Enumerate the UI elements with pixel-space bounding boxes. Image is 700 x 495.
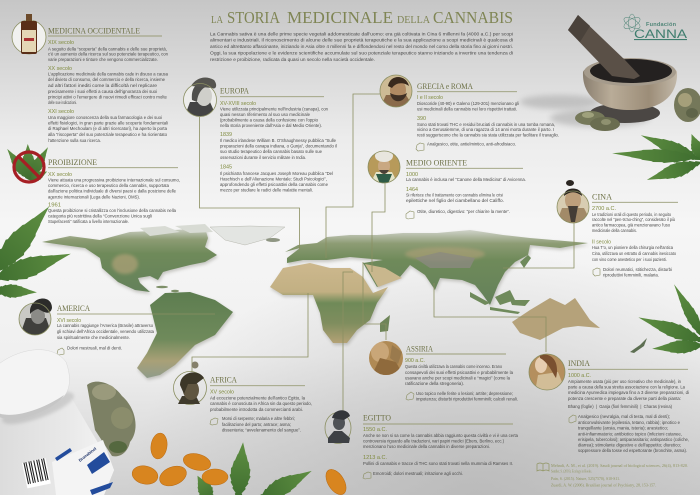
panel: america (19, 298, 155, 355)
connector lines (57, 94, 574, 412)
text: XV secolo (210, 390, 312, 412)
text: indications: Morsi di serpente; malaria e altre febbri; (222, 416, 295, 421)
text: I e II secolo (417, 95, 519, 112)
portrait: european doctor (184, 78, 217, 118)
text: XX secolo: del divieto di consumo, del commercio e della ricerca, insieme (48, 77, 166, 82)
text: 1464: epilettiche nel figlio del ciambellano del Califfo. (406, 198, 504, 203)
panel: india (529, 354, 689, 453)
text: XXI secolo: XXI secolo (48, 109, 74, 115)
text: XVI secolo: gli schiavi dell'Africa occidentale, venendo utilizzata (57, 329, 155, 334)
text: XVI secolo (57, 318, 155, 340)
intro text: antico ed altrettanto affascinante, iniziando in Asia oltre 4 millenni fa e diffondendosi nel resto del mondo nel corso della storia fino ai giorni nostri. (210, 44, 513, 49)
map: southeast asia islands (470, 290, 530, 314)
title: MEDICINALE (287, 8, 393, 27)
text: 1961: Stupefacenti” ratificata a livello internazionale. (48, 219, 129, 224)
text: 1000 a.C.: 1000 a.C. (568, 373, 591, 379)
text: indications: impotenza; disturbi riproduttivi femminili; calcoli renali. (416, 396, 518, 402)
panel: grecia e roma (380, 75, 559, 151)
text: 2700 a.C.: raccolte nel “pen-ts'ao-ching”, considerato il più (592, 217, 676, 222)
text: XX secolo: L'applicazione medicinale della cannabis cade in disuso a causa (48, 72, 169, 76)
portrait: chinese physician (556, 180, 592, 224)
heading: MEDICINA OCCIDENTALE (48, 26, 140, 36)
text: 1839: osservazioni durante il servizio militare in India. (220, 155, 306, 160)
text: XV secolo: XV secolo (210, 390, 234, 396)
text: XXI secolo: effetti fisiologici, in gran parte grazie alle scoperte fondamentali (48, 121, 168, 126)
heading: AFRICA (210, 376, 237, 385)
text: XV secolo: Ad eccezione potenzialmente dell'antico Egitto, la (210, 396, 306, 400)
text: indications: Emorroidi; dolori mestruali; irritazione agli occhi. (373, 471, 463, 476)
references: Pain, S. (2015). Nature, 525(7570), S10-S11. (551, 476, 620, 482)
text: 390: vicino a Gerusalemme, di una ragazza di 14 anni morta durante il parto. I (417, 127, 554, 132)
text: XX secolo: delle sue indicazioni. (48, 100, 77, 105)
map: arctic islands (140, 224, 213, 236)
portrait: medicine bottle (12, 14, 46, 54)
references: Sandler, S. (2016). Ecology in Books. (551, 468, 592, 474)
logo: Fundación Canna (622, 14, 687, 41)
text: 1000 a.C.: parte a causa della sua stretta associazione con la religione. La (568, 384, 686, 390)
text: XX secolo: ad altri fattori inediti come la difficoltà nel replicare (48, 83, 158, 88)
text: II secolo: II secolo (592, 240, 611, 246)
text: XVI secolo: La cannabis raggiunge l'America (Brasile) attraverso (57, 323, 154, 328)
leaves: top right (612, 129, 700, 187)
text: XIX secolo: A seguito della “scoperta” della cannabis e delle sue proprietà, (48, 46, 167, 52)
text: 1845: Il psichiatra francese Jacques Joseph Moreau pubblica “Del (220, 171, 333, 176)
text: 1839: suo studio terapeutico della cannabis basato sulle sue (220, 149, 323, 154)
portrait: american figure (19, 298, 52, 335)
map: africa (270, 263, 388, 343)
text: indications: Analgesico (nevralgia, mal di testa, mal di denti); (578, 414, 670, 419)
text: XXI secolo: di Raphael Mechoulam (e di altri ricercatori), ha aperto la porta (48, 126, 168, 131)
text: 2700 a.C.: 2700 a.C. (592, 206, 616, 212)
map: iceland (266, 238, 280, 242)
panel: europa (184, 78, 337, 192)
text: indications: Otite, diuretico, digestivo: “per chiarire la mente”. (417, 209, 510, 214)
title (211, 8, 513, 27)
text: XXI secolo: l'attenzione sulla sua ricerca. (48, 138, 101, 143)
text: XX secolo: principi attivi o l'emergere di nuovi rimedi efficaci contro molte (48, 94, 168, 100)
text: 1550 a.C.: 1550 a.C. (363, 427, 387, 433)
text: 1839: 1839 (220, 132, 232, 138)
text: 1961: Questa proibizione si cristallizza con l'inclusione della cannabis nella (48, 208, 177, 213)
text: 1000: La cannabis è inclusa nel “Canone della Medicina” di Avicenna. (406, 177, 526, 182)
text: 1550 a.C.: controversia riguardo alle traduzioni, vari papiri medici (Ebers, Berlino, ecc.) (363, 438, 505, 444)
text: indications: anti-infiammatorio; antibiotico topico (infezioni cutanee, (578, 432, 682, 436)
text: XX secolo: precisamente i suoi effetti a causa dell'ignoranza dei suoi (48, 89, 157, 94)
text: indications: erisipela, tubercolosi); antiparassitario; antispastico (coliche, (578, 437, 689, 442)
heading: ASSIRIA (406, 344, 433, 354)
text: 2700 a.C.: Le tradizioni orali di questo periodo, in seguito (592, 212, 672, 217)
text: XV secolo: probabilmente introdotta da commercianti arabi. (210, 407, 303, 412)
map: desert southwest (112, 254, 138, 274)
heading: MEDIO ORIENTE (406, 158, 467, 168)
icon: hand (569, 415, 576, 423)
text: XV-XVIII secolo: XV-XVIII secolo (220, 101, 256, 107)
text: XVI secolo: sia spiritualmente che medicinalmente. (57, 335, 130, 340)
text: 900 a.C.: Questa civiltà utilizzava la cannabis come incenso. Erano (405, 364, 503, 369)
text: XV-XVIII secolo (220, 101, 329, 128)
icon: hand (406, 211, 414, 219)
text: XIX secolo: varie preparazioni e tinture che vengono commercializzate. (48, 57, 158, 62)
text: XX secolo: dall'azione politica individuale di diversi paesi e dalla posizione delle (48, 188, 177, 194)
leaves: lower right (636, 281, 700, 356)
text: 2700 a.C. (592, 206, 676, 233)
text: 1961: 1961 (48, 202, 61, 208)
photo: cannabis bud by bottle (87, 382, 136, 456)
text: indications (222, 416, 301, 432)
references (537, 463, 688, 488)
heading: CINA (592, 192, 612, 202)
map: north america (42, 228, 217, 292)
panel: egitto (325, 410, 519, 479)
intro text: Oggi, la sua ripopolazione e le evidenze scientifiche accumulate sul suo potenziale terapeutico stanno iniziando a invertire una tendenza di (210, 50, 513, 56)
intro text: alimentari e industriali. Il riconoscimento di alcune delle sue proprietà terapeutiche e la sua applicazione a scopi medicinali è qualcosa di (210, 38, 513, 42)
map: eurasia (285, 230, 588, 305)
references: Mehndi, A. M., et al. (2019). Saudi journal of biological sciences, 26(4), 813-820. (551, 463, 688, 469)
map: madagascar (380, 315, 390, 332)
text: indications: anticonvulsivante (epilessia, tetano, rabbia); ipnotico e (578, 420, 681, 425)
heading: AMERICA (57, 304, 90, 313)
photo: medicine bottle: Dronabinol (78, 446, 97, 463)
map: japan (520, 255, 531, 268)
portrait: avicenna (368, 150, 400, 184)
text: XX secolo (48, 66, 169, 105)
heading: GRECIA e ROMA (417, 82, 473, 91)
title: LA (211, 14, 223, 26)
icon: hand (406, 392, 414, 400)
text: 1845: 1845 (220, 164, 232, 170)
icon: hand (210, 418, 218, 425)
text: II secolo: con vino come anestetico per i suoi pazienti. (592, 257, 667, 262)
text: 1845: mezzo per studiare le radici delle malattie mentali. (220, 188, 313, 192)
text: XX secolo: XX secolo (48, 172, 72, 178)
panel: cina (556, 180, 678, 278)
icon: book (537, 463, 549, 471)
map: new zealand (630, 338, 647, 353)
photo: cannabis bud right (674, 88, 700, 122)
text: XIX secolo: XIX secolo (48, 40, 74, 46)
heading: EGITTO (363, 414, 391, 422)
text: 1845: Haschisch e dell'Alienazione Mentale: Studi Psicologici”, (220, 176, 327, 182)
text: indications (603, 267, 672, 278)
text: indications: Dolori reumatici, stitichezza, disturbi (603, 267, 672, 272)
text: 390: 390 (417, 116, 426, 122)
text: XX secolo: XX secolo (48, 66, 72, 72)
text: 1000 a.C.: medicina Ayurvedica impiegava fino a 3 diverse preparazioni, di (568, 390, 689, 395)
text: 1961: categoria più restrittiva della “Convenzione Unica sugli (48, 214, 152, 218)
text: XX secolo: commercio, ricerca e uso terapeutico della cannabis, supportata (48, 183, 170, 188)
text: XV-XVIII secolo: quasi nessun riferimento al suo uso medicinale (220, 112, 311, 117)
text: II secolo: Cina, utilizzava un estratto di cannabis inesiccato (592, 251, 677, 256)
text: XIX secolo: c'è un aumento della ricerca sul suo potenziale terapeutico, con (48, 52, 169, 57)
text: 390: Sono stati trovati THC e residui bruciati di cannabis in una tomba romana, (417, 122, 555, 127)
icon: prohibition sign over leaf (3, 144, 53, 184)
portrait: african bust (174, 362, 206, 404)
map: central asia steppe (405, 247, 485, 261)
text: XX secolo: agenzie internazionali (Lega delle Nazioni, OMS). (48, 194, 140, 200)
text: indications: diarrea); stimolante digestivo e dell'appetito; diuretico; (578, 442, 681, 448)
capsules (130, 432, 350, 495)
text: 2700 a.C.: antico farmacopea, già menzionavano l'uso (592, 222, 671, 228)
text: 1000 a.C.: potenza crescente e preparate da diverse parti della pianta: (568, 396, 681, 401)
photo: medicine bottle (0, 350, 114, 495)
intro text (210, 32, 513, 62)
text: 900 a.C. (405, 358, 514, 386)
portrait: dioscorides (380, 75, 414, 108)
leaves: bottom (191, 441, 316, 495)
text: 1213 a.C. (363, 455, 513, 466)
text: 1845 (220, 164, 333, 192)
text: XXI secolo (48, 109, 168, 143)
text: 1550 a.C.: Anche se non si sa come la cannabis abbia raggiunto questa civiltà e vi è una certa (363, 433, 519, 438)
text: 1550 a.C. (363, 427, 519, 449)
text: 1000 a.C. (568, 373, 689, 409)
panel: medio oriente (368, 150, 526, 219)
text: XXI secolo: alla “riscoperta” del suo potenziale terapeutico e ha riorientato (48, 132, 168, 137)
text: 900 a.C.: ratificazione della stregoneria). (405, 381, 464, 386)
text: 900 a.C.: consapevoli dei suoi effetti psicoattivi e probabilmente la (405, 370, 514, 375)
map: himalaya (415, 252, 475, 268)
text: indications: facilitazione del parto; antrace; asma; (222, 422, 291, 427)
portrait: indian woman (529, 354, 566, 392)
text: 1839 (220, 132, 337, 160)
text: XV-XVIII secolo: (probabilmente a causa della confusione con l'oppio (220, 118, 319, 122)
text: XV-XVIII secolo: nella storia proveniente dall'Asia e dal Medio Oriente). (220, 123, 322, 128)
text: 1464 (406, 187, 504, 203)
text: indications: Uso topico nelle ferite o lesioni; artrite; depressione; (416, 391, 513, 396)
text: 900 a.C.: 900 a.C. (405, 358, 425, 364)
text: indications: riproduttivi femminili, malaria. (603, 272, 659, 278)
text: indications: Dolori mestruali, mal di denti. (67, 346, 122, 350)
map: south america (137, 292, 233, 378)
photo: cannabis bud near mortar (575, 111, 620, 131)
text: 1839: Il medico irlandese William B. O'Shaughnessy pubblica “Sulle (220, 138, 337, 143)
text: XIX secolo (48, 40, 169, 62)
text: 1839: preparazioni della canapa indiana, o Gunja”, documentando il (220, 144, 337, 148)
map: greenland (210, 226, 285, 245)
text: 1845: approfondendo gli effetti psicoattivi della cannabis come (220, 182, 329, 187)
text: indications: soppressore della tosse ed espettorante (bronchite, asma). (578, 448, 687, 453)
map: australia (512, 298, 600, 340)
text: II secolo: Hua T'o, un pioniere della chirurgia nell'antica (592, 245, 674, 250)
text: XV secolo: cannabis è conosciuta in Africa sin da questo periodo, (210, 401, 312, 406)
text: XX secolo: Viene attuata una progressiva proibizione internazionale sul consumo, (48, 178, 180, 182)
portrait: assyrian relief (369, 341, 403, 375)
photo: mortar and pestle (520, 15, 677, 127)
title: CANNABIS (433, 8, 513, 27)
text: indications (416, 391, 518, 402)
leaves: left (0, 199, 74, 299)
text: 1961 (48, 202, 177, 224)
map: caribbean (156, 286, 179, 292)
icon: hand (416, 143, 424, 151)
title: STORIA (227, 8, 280, 27)
intro text: La Cannabis sativa è una delle prime specie vegetali addomesticate dall'uomo: era già coltivata in Cina 6 millenni fa (4000 a.C.) per scopi (210, 32, 513, 36)
text: 1464: Si riferisce che il trattamento con cannabis elimina le crisi (406, 192, 503, 198)
text: XXI secolo: Una maggiore conoscenza della sua farmacologia e dei suoi (48, 115, 162, 120)
panel: assiria (369, 341, 518, 402)
map: arabia (365, 264, 402, 287)
title: DELLA (397, 14, 430, 26)
text: II secolo (592, 240, 677, 262)
icon: hand (363, 472, 371, 479)
text: indications: dissenteria; “avvelenamento del sangue”. (222, 428, 301, 432)
text: 1213 a.C.: Pollini di cannabis e tracce di THC sono stati trovati nella mummia di Ramses II. (363, 461, 513, 466)
text: 900 a.C.: usavano anche per scopi medicinali e “magici” (come la (405, 376, 511, 380)
text: 1464: 1464 (406, 187, 418, 193)
text: indications (578, 414, 689, 453)
text: 390: resti suggeriscono che la cannabis sia stata utilizzata per facilitare il travaglio. (417, 132, 559, 138)
text: I e II secolo: usi medicinali della cannabis nei loro rispettivi trattati. (417, 106, 517, 112)
icon: hand (593, 268, 600, 276)
panel: medicina occidentale (12, 14, 169, 143)
logo: Fundación Canna: Fundación (646, 22, 677, 28)
text: 1000 a.C.: Bhang (foglie) | Ganja (fiori femminili) | Charas (resina) (568, 404, 673, 409)
intro text: restrizione e proibizione, radicata da quasi un secolo nella società occidentale. (210, 57, 375, 62)
text: indications: tranquillante (ansia, mania, isteria); anestetico; (578, 426, 668, 430)
text: 1000 (406, 172, 526, 182)
icon: hand (57, 348, 64, 355)
text: 2700 a.C.: medicinale della cannabis. (592, 228, 637, 233)
text: I e II secolo: Dioscoride (40-90) e Galeno (129-201) menzionano gli (417, 101, 519, 106)
panel: africa (174, 362, 312, 432)
text: 1213 a.C.: 1213 a.C. (363, 455, 387, 461)
logo: Fundación Canna: CANNA (634, 27, 687, 41)
heading: EUROPA (220, 87, 249, 96)
heading: PROIBIZIONE (48, 158, 97, 167)
panel: proibizione (3, 144, 180, 224)
text: XV-XVIII secolo: Viene utilizzata principalmente nell'industria (canapa), con (220, 106, 329, 112)
world map (42, 224, 647, 380)
text: 390 (417, 116, 559, 138)
text: XX secolo (48, 172, 180, 200)
text: 1550 a.C.: menzionano l'uso medicinale della cannabis in diverse preparazioni. (363, 444, 490, 449)
text: I e II secolo: I e II secolo (417, 95, 443, 101)
portrait: egyptian bust (325, 410, 351, 444)
text: 1000: 1000 (406, 172, 418, 178)
text: XVI secolo: XVI secolo (57, 318, 81, 324)
text: indications: Analgesico, otite, antielmintico, anti-afrodisiaco. (427, 142, 516, 146)
text: 1000 a.C.: Ampiamente usata (più per uso ricreativo che medicinale), in (568, 379, 682, 384)
references: Zuardi, A. W. (2006). Brazilian journal of Psychiatry, 28, 153-157. (551, 482, 656, 488)
heading: INDIA (568, 359, 590, 368)
